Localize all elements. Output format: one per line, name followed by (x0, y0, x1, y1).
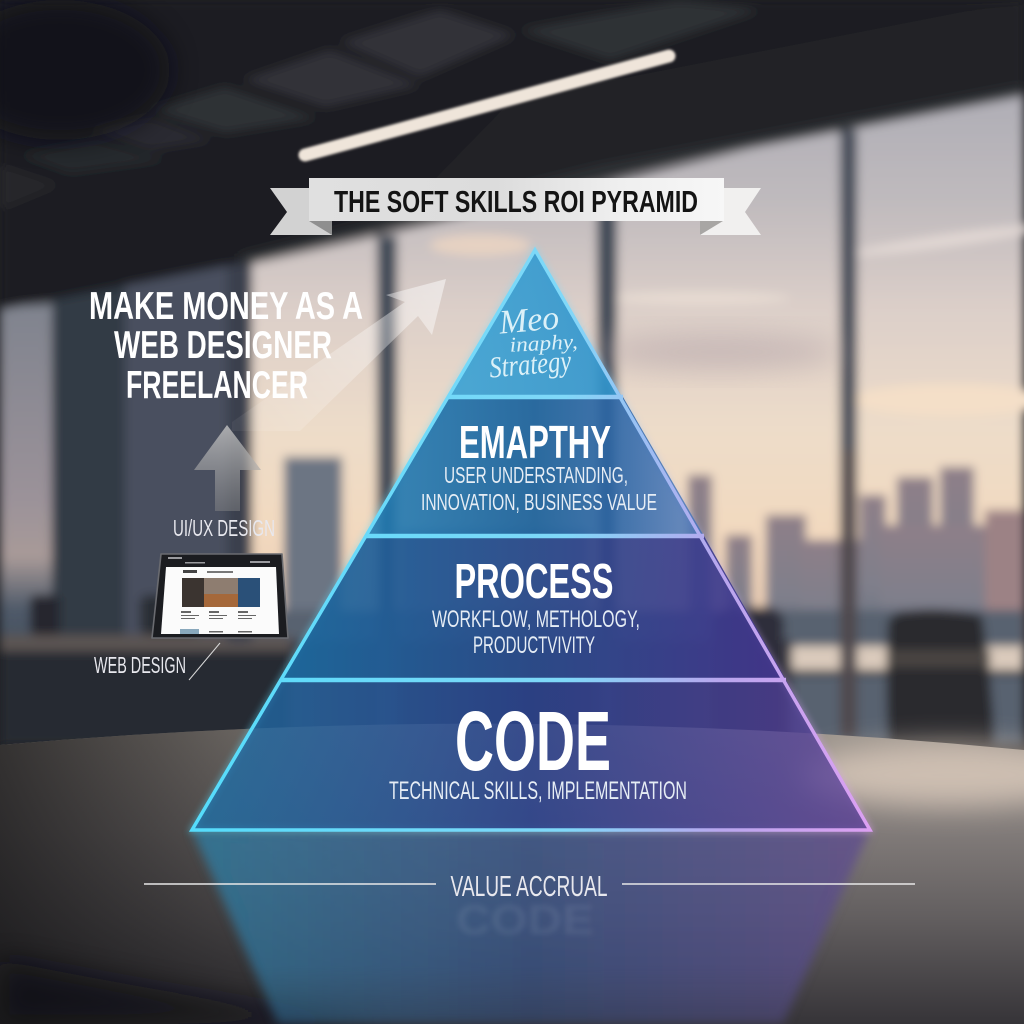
outer glow (192, 250, 870, 830)
process description: PRODUCTVIVITY (473, 632, 595, 659)
headline: WEB DESIGNER (114, 324, 332, 367)
table (0, 724, 1024, 1024)
tier: process (281, 536, 786, 680)
empathy description: INNOVATION, BUSINESS VALUE (421, 489, 657, 515)
heading: code: CODE (455, 694, 611, 788)
tier: top strategy (448, 250, 622, 397)
dark ceiling corner (0, 0, 170, 140)
left wall and column (52, 230, 126, 635)
label: web design: WEB DESIGN (94, 652, 186, 678)
mullions (226, 262, 252, 642)
skyline (284, 457, 1024, 657)
empathy description (421, 462, 657, 515)
arrow: upward (194, 425, 261, 511)
script label (488, 299, 578, 385)
icon: tablet (152, 554, 288, 638)
tier: code (192, 680, 870, 830)
pyramid reflection on table: CODE (456, 896, 594, 943)
arrow: diagonal growth (232, 279, 446, 431)
pyramid reflection on table (192, 830, 870, 1024)
heading: empathy: EMAPTHY (459, 416, 611, 468)
process description (432, 606, 640, 659)
ceiling panels (340, 10, 515, 77)
headline: FREELANCER (126, 364, 308, 407)
title ribbon (270, 178, 761, 235)
headline: MAKE MONEY AS A (89, 285, 363, 328)
script label: Strategy (488, 344, 573, 385)
heading: process: PROCESS (454, 555, 614, 609)
pointer line: web design (189, 643, 220, 680)
code description: TECHNICAL SKILLS, IMPLEMENTATION (389, 777, 687, 805)
empathy description: USER UNDERSTANDING, (444, 462, 628, 488)
script label: Meo (497, 299, 561, 342)
ceiling light (305, 56, 669, 155)
value accrual axis: VALUE ACCRUAL (450, 871, 608, 903)
script label: inaphy, (509, 329, 578, 357)
chairs (886, 609, 995, 745)
label: ui/ux design: UI/UX DESIGN (173, 515, 275, 541)
clouds (430, 234, 530, 256)
tier: empathy (366, 397, 704, 536)
window sky (232, 85, 1024, 740)
process description: WORKFLOW, METHOLOGY, (432, 606, 640, 633)
title text: THE SOFT SKILLS ROI PYRAMID (334, 184, 698, 219)
pyramid edges and tier separators (192, 250, 870, 830)
cloud band (600, 334, 840, 370)
headline (89, 285, 363, 407)
pyramid (192, 250, 870, 830)
ceiling (0, 0, 1024, 310)
